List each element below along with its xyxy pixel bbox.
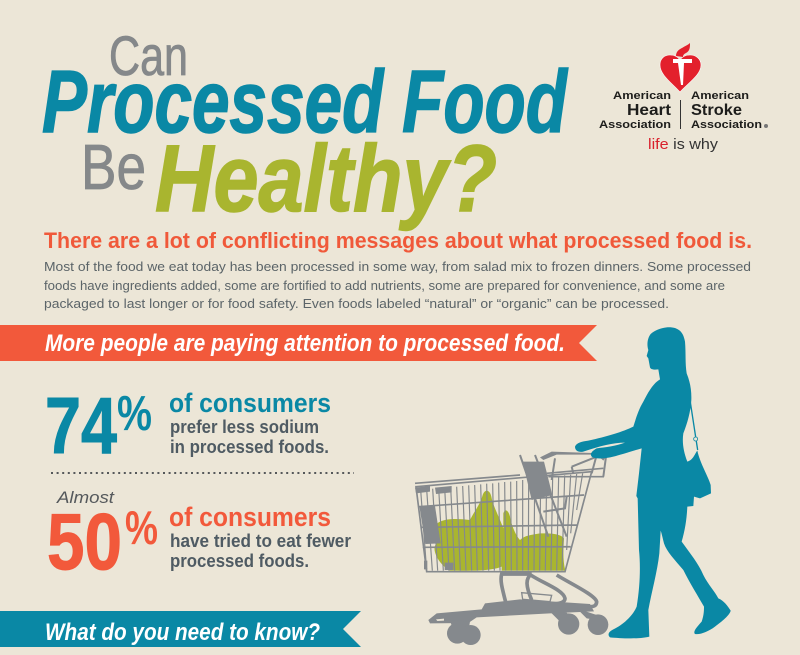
icon: heart and torch — [660, 43, 701, 92]
dotted divider — [51, 472, 354, 474]
icon: groceries — [434, 491, 565, 571]
cart wires — [421, 473, 583, 571]
stat: almost 50%: processed foods. — [170, 551, 309, 571]
icon: bag strap — [690, 400, 698, 450]
stat: almost 50%: have tried to eat fewer — [170, 531, 351, 551]
icon: shopping cart — [415, 455, 606, 607]
intro text block: packaged to last longer or for food safety. Even foods labeled “natural” or “organic” can be processed. — [44, 296, 669, 311]
illustration: shopper with cart — [415, 327, 731, 645]
intro text block: foods have ingredients added, some are fortified to add nutrients, some are prepared for convenience, and some are — [44, 278, 725, 293]
stat: 74%: 74 — [45, 381, 117, 470]
stat: almost 50%: % — [125, 501, 158, 554]
logo: American Heart Association / American Stroke Association: Association — [599, 119, 671, 131]
intro text block — [44, 259, 751, 311]
stat: almost 50%: 50 — [47, 497, 122, 586]
cart rails — [415, 468, 604, 572]
title: Processed Food — [42, 52, 569, 151]
banner: what do you need to know: What do you need to know? — [45, 619, 320, 646]
icon: woman silhouette — [575, 327, 731, 638]
cart undercarriage — [501, 574, 597, 607]
title: Be — [81, 131, 146, 203]
title: Healthy? — [155, 126, 497, 232]
banner: more people — [0, 325, 597, 361]
stat: almost 50%: Almost — [56, 488, 115, 507]
logo: American Heart Association / American Stroke Association: Stroke — [691, 102, 742, 119]
cart handle frame — [520, 455, 606, 537]
banner: what do you need to know — [0, 611, 361, 647]
logo: American Heart Association / American Stroke Association: life is why — [648, 137, 719, 153]
stat: 74%: % — [117, 387, 152, 441]
stat: 74%: of consumers — [169, 388, 331, 418]
stat: 74%: in processed foods. — [170, 437, 329, 457]
logo: American Heart Association / American Stroke Association — [599, 43, 768, 153]
intro text block: Most of the food we eat today has been processed in some way, from salad mix to frozen dinners. Some processed — [44, 259, 751, 274]
stat: almost 50% — [47, 488, 351, 586]
title — [42, 24, 569, 232]
stat: 74%: prefer less sodium — [170, 417, 319, 437]
logo: American Heart Association / American Stroke Association: Heart — [627, 102, 671, 119]
heading: There are a lot of conflicting messages about what processed food is. — [44, 228, 752, 253]
title: Can — [109, 24, 188, 87]
banner: more people: More people are paying attention to processed food. — [45, 330, 565, 357]
logo: American Heart Association / American Stroke Association: Association — [691, 119, 762, 131]
stat: 74% — [45, 381, 331, 470]
stat: almost 50%: of consumers — [169, 502, 331, 532]
logo: American Heart Association / American Stroke Association: American — [691, 90, 749, 102]
logo: American Heart Association / American Stroke Association: American — [613, 90, 671, 102]
